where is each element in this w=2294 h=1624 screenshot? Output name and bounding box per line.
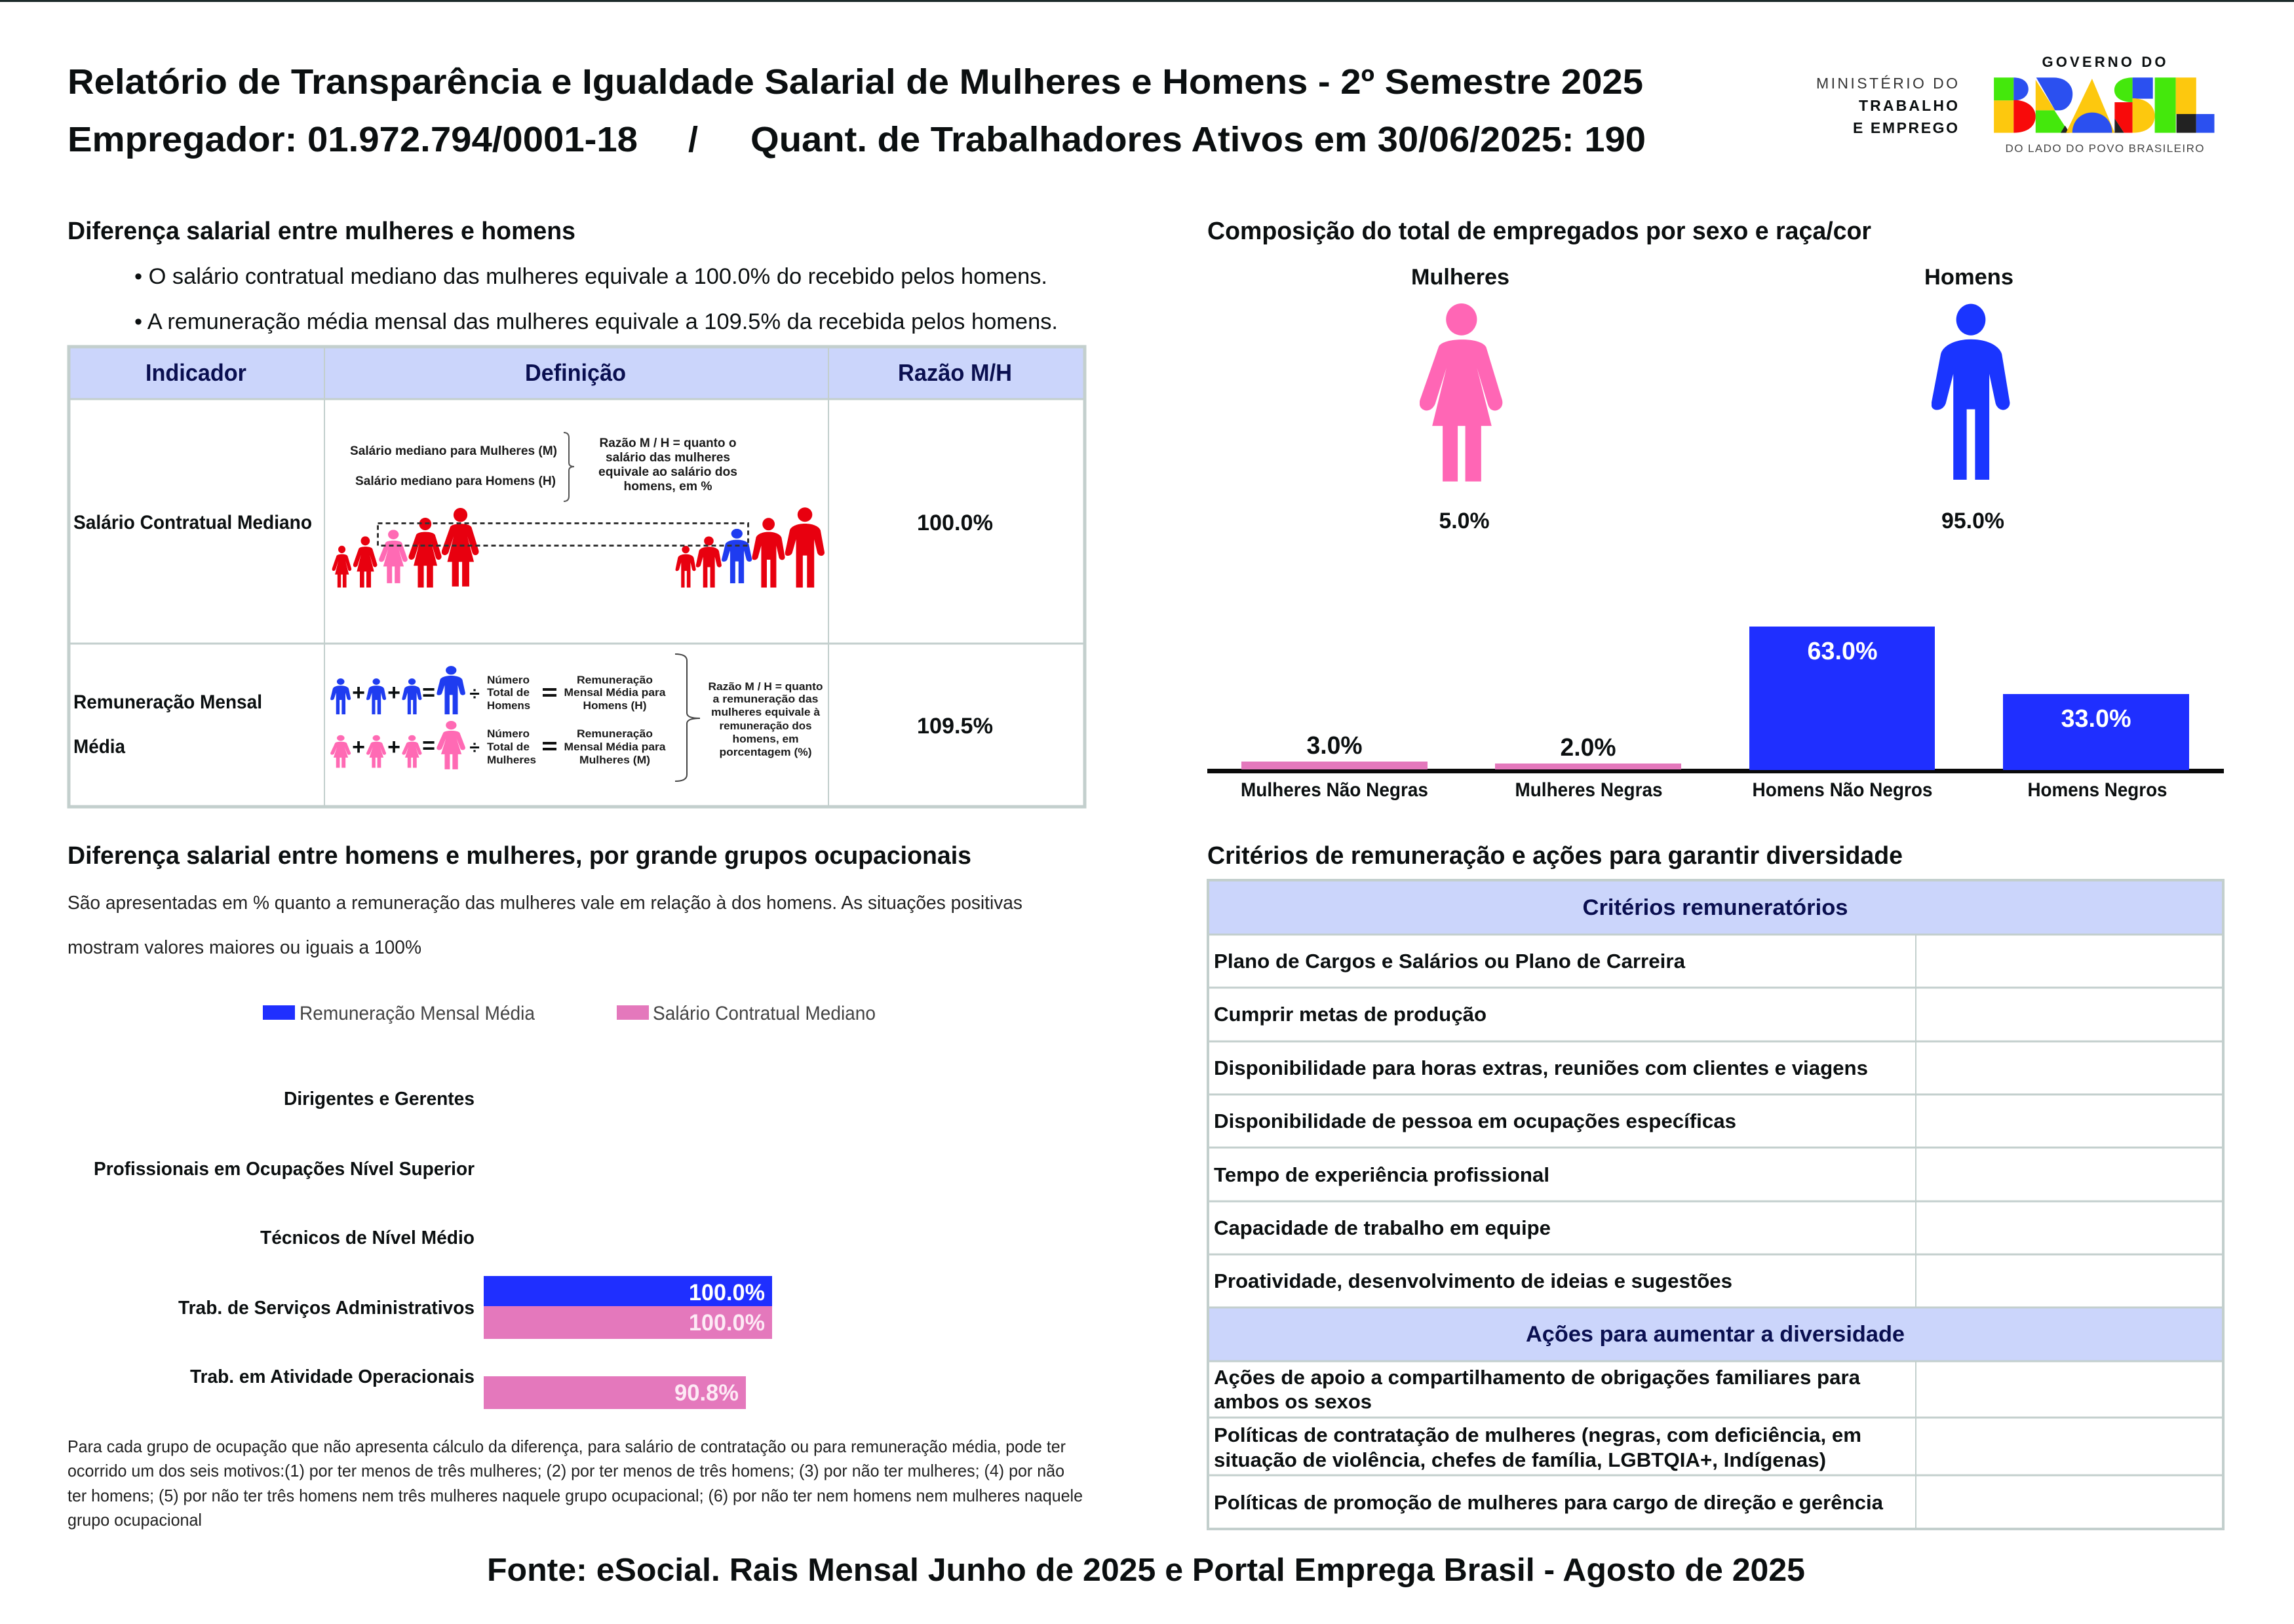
diagram: remuneração média: + xyxy=(387,680,400,705)
rows: ações: Políticas de promoção de mulheres para cargo de direção e gerência xyxy=(1214,1491,1884,1514)
table header: ações para aumentar a diversidade: Ações para aumentar a diversidade xyxy=(1526,1322,1905,1347)
bar chart: grupos ocupacionais xyxy=(94,1089,772,1409)
diagram: remuneração média: porcentagem (%) xyxy=(720,746,811,758)
diagram: salário mediano: Razão M / H = quanto o xyxy=(599,436,737,450)
title: Empregador: 01.972.794/0001-18 xyxy=(68,120,638,159)
footnote: ocorrido um dos seis motivos:(1) por ter menos de três mulheres; (2) por ter menos de três homens; (3) por não ter mulheres; (4) por não xyxy=(68,1461,1064,1480)
diagram: remuneração média: Razão M / H = quanto xyxy=(708,680,823,693)
rows: critérios: Cumprir metas de produção xyxy=(1214,1003,1487,1026)
diagram: remuneração média: Total de xyxy=(487,686,530,699)
bar: trab. em atividade operacionais xyxy=(484,1376,746,1409)
table header: Definição xyxy=(525,359,626,386)
icon: men equation xyxy=(330,666,465,769)
panel: diferença salarial xyxy=(68,218,1058,334)
legend xyxy=(263,1003,876,1024)
logo: ministério do trabalho e emprego: E EMPREGO xyxy=(1853,119,1958,136)
logo: colored BRASIL shapes xyxy=(1994,77,2215,133)
text block: bullets: • O salário contratual mediano das mulheres equivale a 100.0% do recebido pelos homens. xyxy=(134,264,1047,289)
bar: mulheres negras: Mulheres Negras xyxy=(1515,779,1662,801)
row label: remuneração mensal média: Remuneração Mensal xyxy=(73,691,262,713)
rows: ações: Políticas de contratação de mulheres (negras, com deficiência, em xyxy=(1214,1423,1861,1446)
diagram: remuneração média: Número xyxy=(487,674,530,686)
panel: composição por sexo e raça xyxy=(1207,218,2224,801)
value: 5.0%: 5.0% xyxy=(1439,509,1489,533)
panel: grupos ocupacionais xyxy=(68,842,1083,1530)
rows: critérios: Tempo de experiência profissional xyxy=(1214,1163,1549,1186)
diagram: salário mediano: Salário mediano para Mulheres (M) xyxy=(350,444,557,458)
legend: Remuneração Mensal Média xyxy=(300,1003,535,1024)
footer: fonte: Fonte: eSocial. Rais Mensal Junho de 2025 e Portal Emprega Brasil - Agosto de 2025 xyxy=(487,1553,1805,1588)
bar: homens não negros xyxy=(1749,627,1935,801)
footnote: Para cada grupo de ocupação que não apresenta cálculo da diferença, para salário de contratação ou para remuneração média, pode ter xyxy=(68,1437,1066,1456)
rows: critérios: Capacidade de trabalho em equipe xyxy=(1214,1216,1551,1239)
value: 109.5%: 109.5% xyxy=(917,714,993,739)
rows: ações xyxy=(1214,1366,1884,1514)
bar: homens negros: Homens Negros xyxy=(2028,779,2167,801)
diagram: remuneração média: Remuneração xyxy=(577,727,653,740)
row label: salário contratual mediano: Salário Contratual Mediano xyxy=(73,512,312,533)
bar: mulheres negras xyxy=(1495,734,1681,801)
logo: governo do brasil: DO LADO DO POVO BRASILEIRO xyxy=(2006,142,2204,155)
heading: diferença salarial: Diferença salarial entre mulheres e homens xyxy=(68,218,575,245)
text block: bullets xyxy=(134,264,1058,334)
diagram: remuneração média: Mulheres (M) xyxy=(579,754,650,766)
title: Relatório de Transparência e Igualdade Salarial de Mulheres e Homens - 2º Semestre 2025 xyxy=(68,62,1643,102)
rows: critérios: Plano de Cargos e Salários ou Plano de Carreira xyxy=(1214,950,1686,973)
value: 95.0%: 95.0% xyxy=(1941,509,2004,533)
diagram: remuneração média: a remuneração das xyxy=(713,693,818,705)
diagram: remuneração média: Mulheres xyxy=(487,754,536,766)
diagram: remuneração média: + xyxy=(352,680,365,705)
diagram: remuneração média: + xyxy=(387,735,400,760)
diagram: remuneração média: Remuneração xyxy=(577,674,653,686)
diagram: remuneração média: Número xyxy=(487,727,530,740)
footnote: grupo ocupacional xyxy=(68,1510,202,1530)
table header xyxy=(69,345,1085,399)
diagram: salário mediano: salário das mulheres xyxy=(606,451,730,465)
diagram: remuneração média xyxy=(330,654,823,781)
heading: composição: Composição do total de empregados por sexo e raça/cor xyxy=(1207,218,1871,245)
label: mulheres: Mulheres xyxy=(1411,265,1509,290)
heading: grupos ocupacionais: Diferença salarial entre homens e mulheres, por grande grupos ocupacionais xyxy=(68,842,971,870)
bar: homens negros: 33.0% xyxy=(2061,705,2131,733)
text block: explanation xyxy=(68,893,1022,958)
title xyxy=(68,62,1646,159)
diagram: remuneração média: + xyxy=(352,735,365,760)
rows: ações: Ações de apoio a compartilhamento de obrigações familiares para xyxy=(1214,1366,1861,1389)
footnote: ter homens; (5) por não ter três homens nem três mulheres naquele grupo ocupacional; (6) por não ter nem homens nem mulheres naquele xyxy=(68,1486,1083,1505)
bars: trab. de serviços administrativos: 100.0% xyxy=(689,1310,765,1336)
diagram: remuneração média: Homens xyxy=(487,699,530,712)
label: homens: Homens xyxy=(1924,265,2013,290)
diagram: remuneração média: = xyxy=(422,733,435,758)
bar: homens negros xyxy=(2003,694,2189,801)
diagram: remuneração média: Homens (H) xyxy=(583,699,646,712)
bar chart: grupos ocupacionais: Dirigentes e Gerentes xyxy=(284,1089,475,1110)
text block: bullets: • A remuneração média mensal das mulheres equivale a 109.5% da recebida pelos homens. xyxy=(134,309,1058,334)
bar chart: grupos ocupacionais: Trab. em Atividade Operacionais xyxy=(190,1366,475,1387)
footnote xyxy=(68,1437,1083,1530)
bar: mulheres não negras: Mulheres Não Negras xyxy=(1241,779,1428,801)
diagram: salário mediano: equivale ao salário dos xyxy=(598,465,737,479)
diagram: salário mediano: homens, em % xyxy=(624,480,712,493)
bar: mulheres negras: 2.0% xyxy=(1560,734,1616,762)
diagram: remuneração média: remuneração dos xyxy=(720,720,811,732)
diagram: remuneração média: Total de xyxy=(487,741,530,753)
text block: explanation: mostram valores maiores ou iguais a 100% xyxy=(68,937,421,958)
diagram: remuneração média: Mensal Média para xyxy=(564,686,666,699)
row label: remuneração mensal média: Média xyxy=(73,736,125,758)
title: Quant. de Trabalhadores Ativos em 30/06/2025: 190 xyxy=(750,120,1646,159)
icon: man xyxy=(1932,304,2010,480)
row label: remuneração mensal média xyxy=(73,691,262,758)
table header: ações para aumentar a diversidade xyxy=(1208,1307,2223,1361)
diagram: remuneração média: mulheres equivale à xyxy=(711,706,821,718)
diagram: remuneração média: = xyxy=(422,680,435,705)
logo: ministério do trabalho e emprego xyxy=(1816,75,1958,136)
logo: ministério do trabalho e emprego: TRABALHO xyxy=(1859,97,1958,114)
bars: trab. de serviços administrativos xyxy=(484,1276,772,1339)
bar: mulheres não negras: 3.0% xyxy=(1307,732,1362,760)
rows: critérios: Proatividade, desenvolvimento de ideias e sugestões xyxy=(1214,1269,1732,1292)
logo: ministério do trabalho e emprego: MINISTÉRIO DO xyxy=(1816,75,1958,92)
table header: critérios remuneratórios xyxy=(1208,880,2223,935)
rows: ações: situação de violência, chefes de família, LGBTQIA+, Indígenas) xyxy=(1214,1448,1826,1471)
diagram: remuneração média: ÷ xyxy=(469,684,480,704)
rows: critérios: Disponibilidade de pessoa em ocupações específicas xyxy=(1214,1110,1736,1132)
text block: explanation: São apresentadas em % quanto a remuneração das mulheres vale em relação à dos homens. As situações positivas xyxy=(68,893,1022,914)
bar: homens não negros: Homens Não Negros xyxy=(1753,779,1932,801)
title: / xyxy=(688,120,698,159)
bar: trab. em atividade operacionais: 90.8% xyxy=(674,1380,739,1406)
bars: trab. de serviços administrativos: 100.0% xyxy=(689,1280,765,1305)
panel: critérios e ações xyxy=(1207,842,2223,1530)
bar chart: sexo e raça xyxy=(1207,627,2224,801)
table: critérios e ações xyxy=(1208,880,2223,1530)
bar chart: grupos ocupacionais: Profissionais em Ocupações Nível Superior xyxy=(94,1159,475,1180)
legend: Salário Contratual Mediano xyxy=(653,1003,876,1024)
rows: critérios xyxy=(1214,950,1868,1292)
icon: woman xyxy=(1420,303,1502,482)
bar: mulheres não negras xyxy=(1241,732,1428,801)
diagram: remuneração média: Mensal Média para xyxy=(564,741,666,753)
diagram: salário mediano xyxy=(332,433,825,588)
heading: critérios: Critérios de remuneração e ações para garantir diversidade xyxy=(1207,842,1903,870)
diagram: remuneração média: ÷ xyxy=(469,737,480,758)
bar chart: grupos ocupacionais: Trab. de Serviços Administrativos xyxy=(178,1298,475,1319)
panel: indicator table xyxy=(69,345,1085,807)
table header: critérios remuneratórios: Critérios remuneratórios xyxy=(1582,895,1848,920)
table header: Razão M/H xyxy=(898,359,1012,386)
diagram: salário mediano: Salário mediano para Homens (H) xyxy=(355,474,556,488)
value: 100.0%: 100.0% xyxy=(917,511,993,535)
logo: governo do brasil: GOVERNO DO xyxy=(2042,54,2166,70)
diagram: remuneração média: homens, em xyxy=(733,733,798,745)
rows: critérios: Disponibilidade para horas extras, reuniões com clientes e viagens xyxy=(1214,1056,1868,1079)
bar chart: grupos ocupacionais: Técnicos de Nível Médio xyxy=(260,1228,475,1248)
icon: family figures xyxy=(332,507,825,588)
rows: ações: ambos os sexos xyxy=(1214,1390,1372,1413)
bar: homens não negros: 63.0% xyxy=(1808,638,1877,665)
logo: governo do brasil xyxy=(1994,54,2215,155)
table header: Indicador xyxy=(146,359,246,386)
